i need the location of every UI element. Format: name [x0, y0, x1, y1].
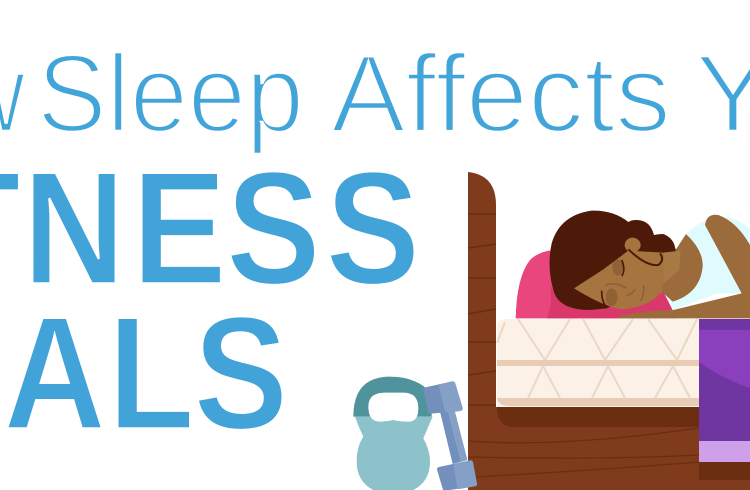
icon: dumbbell [426, 384, 475, 488]
illustration: bed and sleeper [353, 172, 750, 490]
mattress [497, 319, 699, 407]
face [574, 238, 681, 309]
pillow [516, 250, 677, 318]
icon: kettlebell [353, 377, 433, 490]
blanket [699, 319, 750, 480]
arm [617, 215, 750, 318]
hair [550, 211, 676, 310]
shoulder and neck [657, 234, 703, 302]
bed frame [468, 172, 750, 490]
title: how sleep affects your [0, 32, 750, 156]
title: how sleep affects your: Sleep [37, 32, 304, 156]
shirt [670, 217, 750, 310]
sleeping person [516, 211, 750, 318]
title: how sleep affects your: Affects [331, 32, 671, 156]
